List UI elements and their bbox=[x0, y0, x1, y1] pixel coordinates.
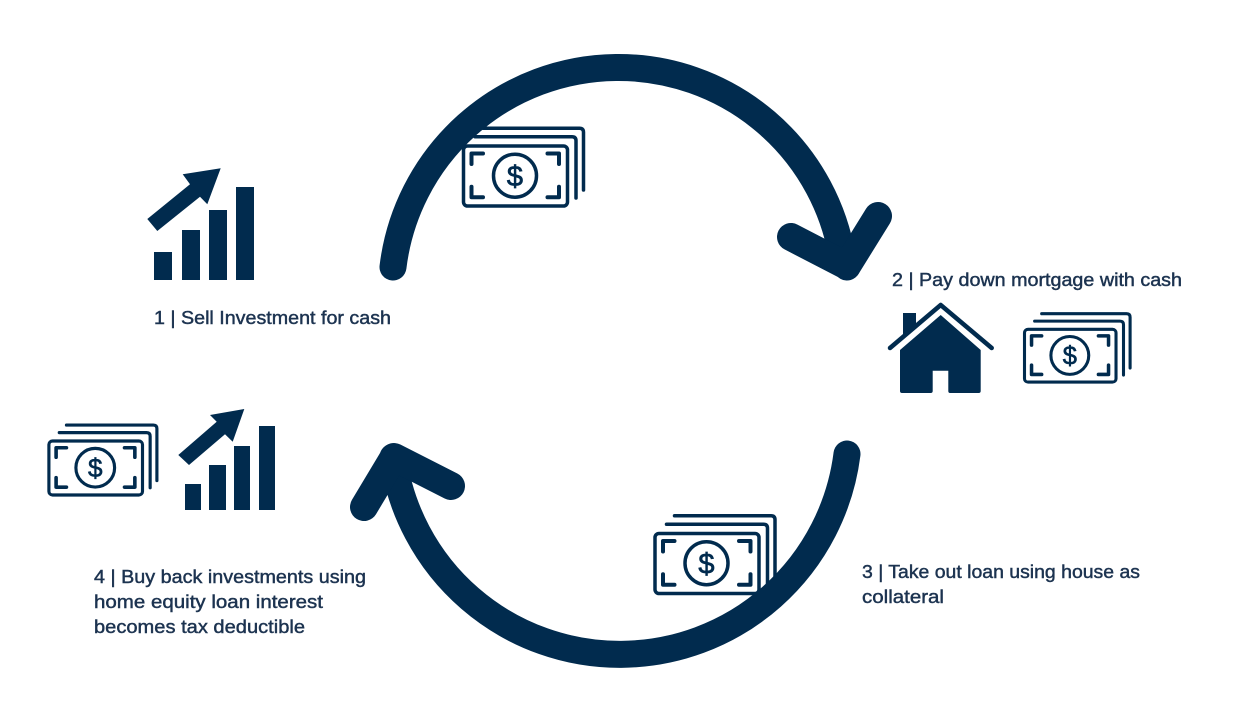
text: step 2: 2 | Pay down mortgage with cash bbox=[892, 269, 1182, 290]
icon: money, step 4 bbox=[49, 425, 157, 495]
text: step 4 bbox=[94, 566, 366, 637]
arrow: bottom arc from step 3 to step 4 bbox=[364, 454, 847, 654]
text: step 1: 1 | Sell Investment for cash bbox=[154, 307, 391, 328]
icon: money, step 2 bbox=[1024, 314, 1130, 382]
icon: money near bottom arrow bbox=[655, 516, 775, 594]
text: step 4: becomes tax deductible bbox=[94, 616, 305, 637]
text: step 3: 3 | Take out loan using house as bbox=[862, 561, 1140, 582]
icon: rising bar chart, step 4 bbox=[178, 409, 275, 510]
text: step 4: 4 | Buy back investments using bbox=[94, 566, 366, 587]
arrow: top arc from step 1 to step 2 bbox=[393, 67, 878, 267]
icon: money, step 2: $ bbox=[1063, 342, 1077, 370]
icon: rising bar chart, step 1 bbox=[147, 168, 254, 280]
icon: money near top arrow: $ bbox=[507, 161, 523, 193]
text: step 3 bbox=[862, 561, 1140, 607]
icon: house bbox=[890, 305, 992, 393]
icon: money near bottom arrow: $ bbox=[698, 548, 715, 580]
text: step 4: home equity loan interest bbox=[94, 591, 323, 612]
icon: money, step 4: $ bbox=[88, 453, 103, 483]
text: step 3: collateral bbox=[862, 586, 944, 607]
icon: money near top arrow bbox=[464, 128, 584, 206]
